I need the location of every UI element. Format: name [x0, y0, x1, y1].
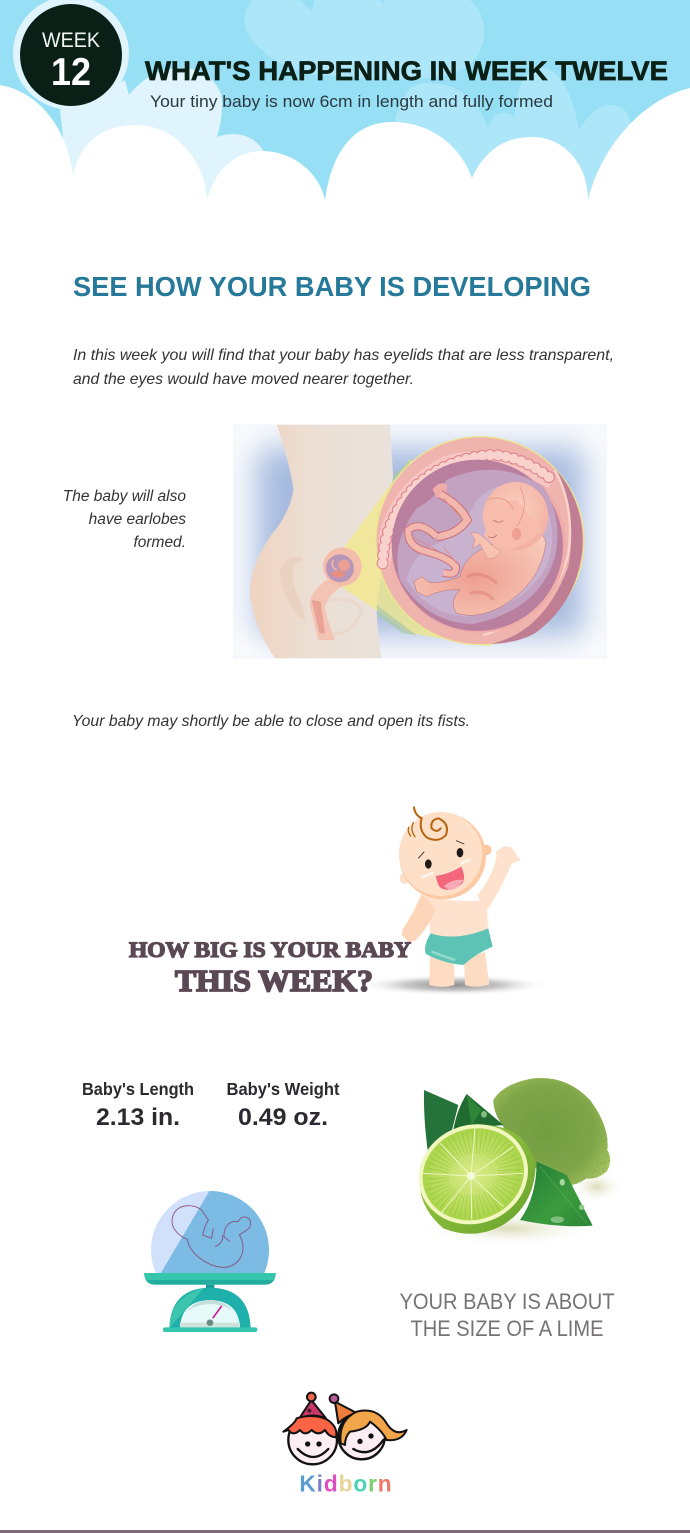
heading: how big is your baby	[129, 937, 411, 998]
heading: how big is your baby: THIS WEEK?	[175, 963, 373, 998]
stat: baby's length	[82, 1079, 194, 1131]
foreground white clouds	[0, 85, 690, 230]
stat: baby's weight	[226, 1079, 340, 1131]
illustration: cartoon baby	[357, 807, 550, 996]
stat: baby's length: Baby's Length	[82, 1079, 194, 1099]
lime caption: YOUR BABY IS ABOUT	[400, 1289, 614, 1314]
icon: scale with fetus	[144, 1190, 276, 1332]
stat: baby's weight: 0.49 oz.	[238, 1104, 328, 1131]
intro paragraph	[73, 347, 614, 388]
background cloud: right	[393, 68, 640, 200]
week badge	[13, 0, 129, 110]
week badge: WEEK	[42, 29, 100, 52]
background cloud: left	[60, 68, 264, 210]
lime caption	[400, 1289, 614, 1341]
illustration: lime with leaves	[404, 1078, 623, 1247]
side note: earlobes: formed.	[133, 534, 186, 551]
title: WHAT'S HAPPENING IN WEEK TWELVE	[145, 56, 668, 86]
caption: fists: Your baby may shortly be able to close and open its fists.	[72, 713, 470, 730]
stat: baby's weight: Baby's Weight	[226, 1079, 340, 1099]
illustration: fetus in womb	[233, 425, 607, 658]
side note: earlobes: The baby will also	[63, 488, 186, 505]
lime caption: THE SIZE OF A LIME	[410, 1316, 604, 1341]
heading: how big is your baby: HOW BIG IS YOUR BABY	[129, 937, 411, 962]
intro paragraph: In this week you will find that your baby has eyelids that are less transparent,	[73, 347, 614, 364]
week badge: 12	[51, 51, 91, 94]
section heading: SEE HOW YOUR BABY IS DEVELOPING	[73, 271, 591, 302]
intro paragraph: and the eyes would have moved nearer together.	[73, 371, 414, 388]
subtitle: Your tiny baby is now 6cm in length and fully formed	[150, 93, 553, 111]
footer rule	[0, 1530, 690, 1533]
side note: earlobes	[63, 488, 186, 551]
logo: Kidborn	[283, 1393, 407, 1497]
logo: Kidborn: Kidborn	[299, 1471, 392, 1497]
header sky background	[0, 0, 690, 215]
side note: earlobes: have earlobes	[89, 511, 186, 528]
background cloud: top centre	[245, 0, 484, 79]
stat: baby's length: 2.13 in.	[96, 1104, 180, 1131]
